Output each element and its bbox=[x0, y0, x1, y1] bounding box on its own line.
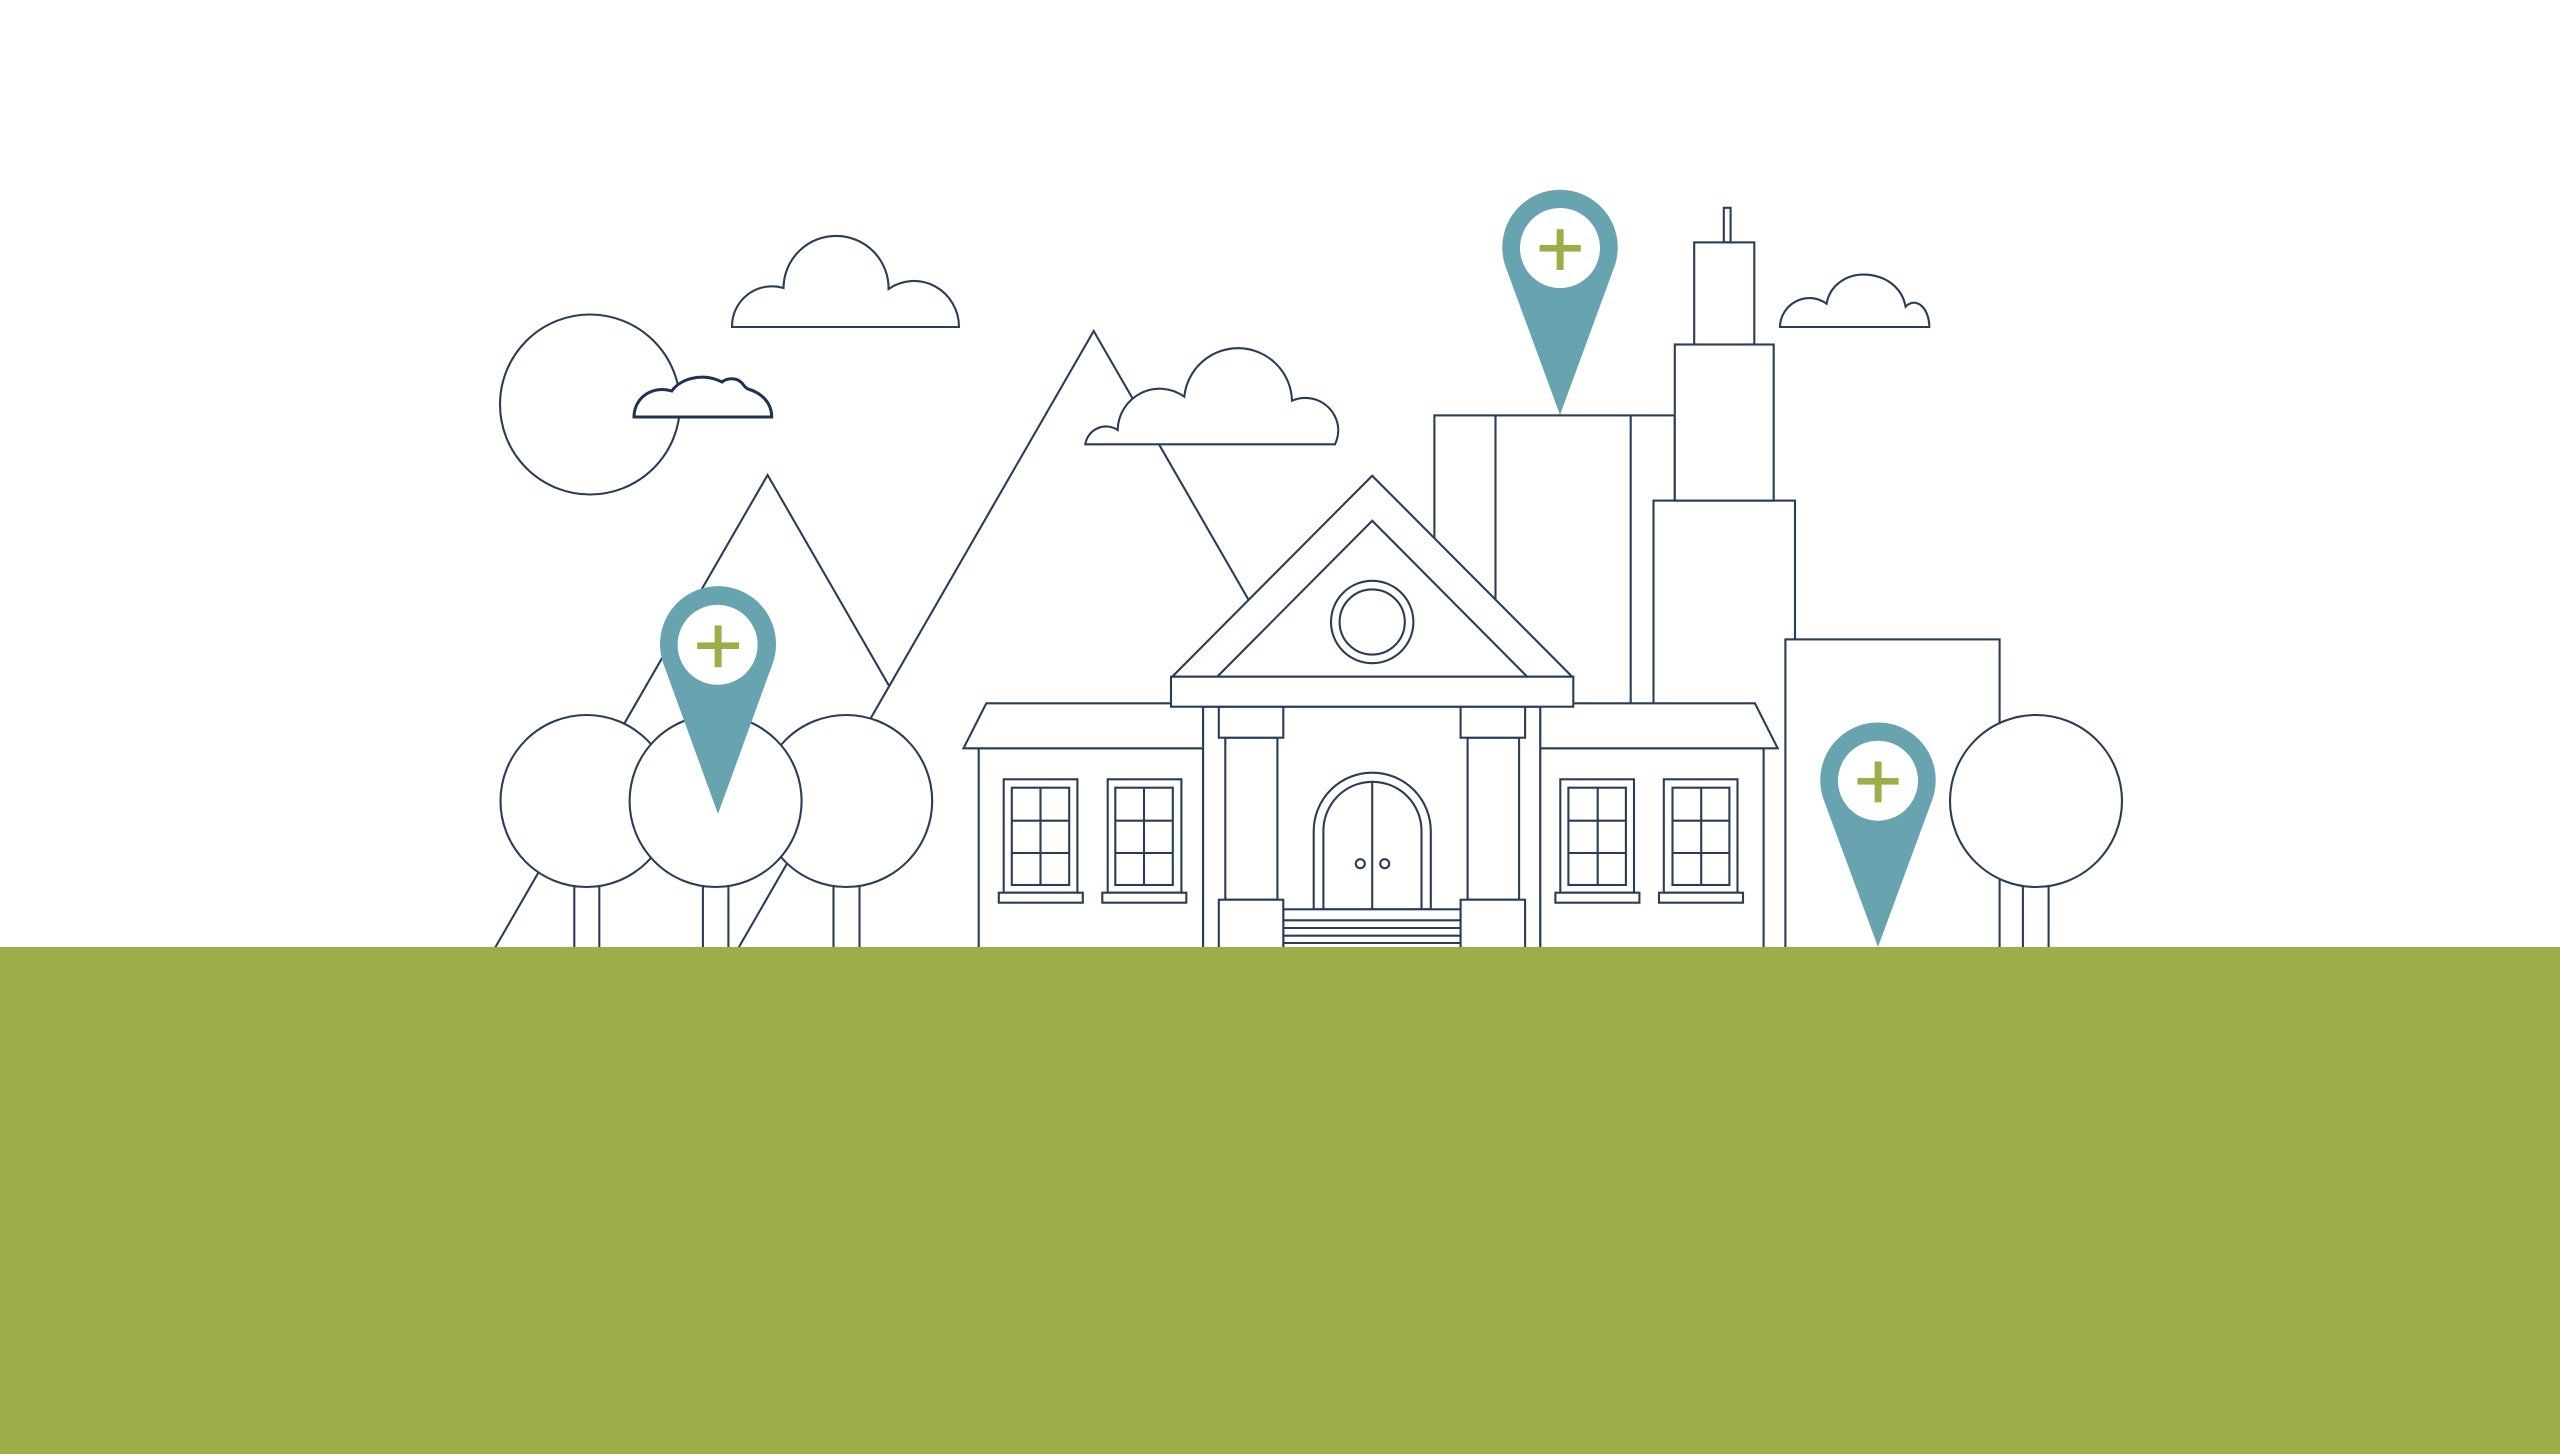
tree: right of group bbox=[760, 715, 932, 960]
tree: far right bbox=[1950, 715, 2122, 960]
door bbox=[1314, 773, 1431, 909]
steps bbox=[1283, 909, 1461, 960]
roof: entablature bbox=[1171, 677, 1573, 707]
tower: lower section bbox=[1654, 501, 1795, 960]
tree: centre bbox=[630, 715, 802, 960]
mountain: large bbox=[732, 331, 1456, 960]
skyline buildings bbox=[1434, 208, 2000, 960]
ground bbox=[0, 947, 2560, 1454]
column: right bbox=[1461, 707, 1525, 960]
window: right 2 bbox=[1659, 779, 1743, 903]
building: back block bbox=[1434, 415, 1675, 960]
window: left 2 bbox=[1102, 779, 1186, 903]
cloud: on mountain bbox=[1085, 348, 1338, 444]
pin: on right building bbox=[1820, 722, 1936, 947]
building: right block bbox=[1785, 639, 2000, 960]
pin: on trees bbox=[660, 586, 776, 814]
pin: on skyline bbox=[1502, 190, 1618, 415]
window: right 1 bbox=[1555, 779, 1639, 903]
roof: pediment bbox=[1172, 476, 1572, 677]
house: right wing bbox=[1540, 703, 1778, 960]
tree: left bbox=[500, 715, 672, 960]
tower: top section bbox=[1694, 242, 1754, 344]
column: left bbox=[1219, 707, 1283, 960]
porch wall bbox=[1203, 707, 1540, 960]
house: left wing bbox=[964, 703, 1203, 960]
tower: middle section bbox=[1675, 344, 1774, 501]
house bbox=[964, 476, 1778, 960]
cloud: top right bbox=[1780, 275, 1929, 327]
tower: antenna bbox=[1724, 208, 1731, 242]
sun bbox=[500, 314, 680, 494]
window: left 1 bbox=[999, 779, 1083, 903]
cloud: top left bbox=[732, 236, 959, 327]
cloud: over sun bbox=[634, 377, 772, 417]
mountain: small bbox=[488, 475, 1047, 960]
